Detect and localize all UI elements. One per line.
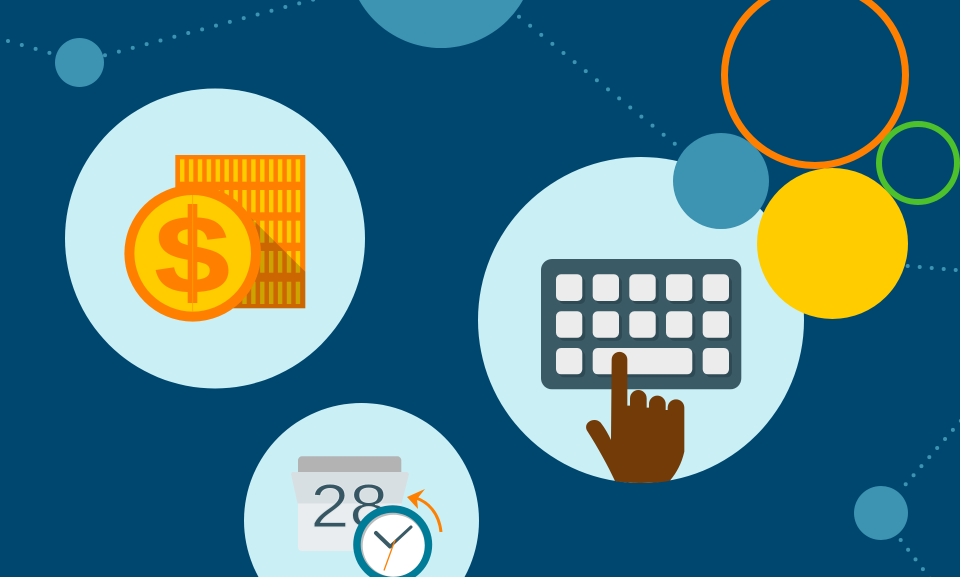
icon: keyboard: [541, 259, 741, 389]
green ring: [879, 124, 957, 202]
icon: orange return arrow: [407, 489, 441, 532]
icon: calendar: 28: [310, 472, 388, 540]
icon: calendar: [291, 456, 409, 551]
panel: money: [65, 88, 365, 388]
small teal node, bottom right: [854, 486, 908, 540]
icon: clock: [353, 505, 432, 577]
panel: deadline: [244, 403, 479, 577]
icon: pointing hand: [586, 352, 684, 483]
icon: stack of coins: [175, 155, 305, 308]
orange ring: [724, 0, 906, 166]
teal node over keyboard panel: [673, 133, 769, 229]
icon: dollar coin: [124, 185, 261, 322]
panel: keyboard: [478, 157, 804, 483]
small teal node, top left: [55, 38, 104, 87]
yellow circle: [757, 168, 908, 319]
icon: dollar coin: $: [155, 193, 230, 316]
large teal node, top centre: [347, 0, 535, 48]
